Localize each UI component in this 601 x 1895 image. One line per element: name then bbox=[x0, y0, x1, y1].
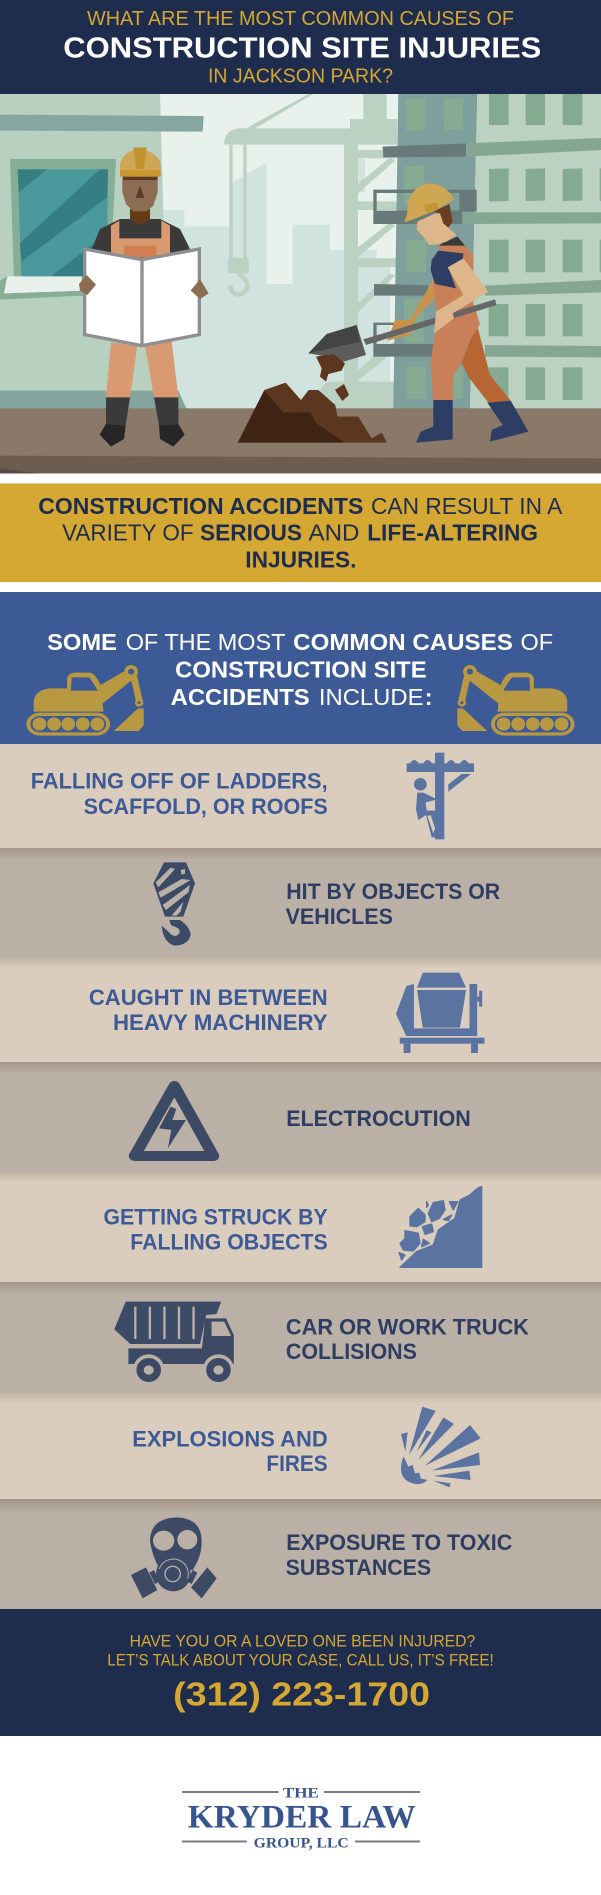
panel: blue section heading: CONSTRUCTION SITE bbox=[175, 657, 427, 683]
row: exposure to toxic substances bbox=[0, 1499, 601, 1609]
icon: crane hook bbox=[153, 862, 195, 946]
row: getting struck by falling objects bbox=[0, 1172, 601, 1282]
row text bbox=[286, 1314, 529, 1364]
row text bbox=[286, 1530, 512, 1580]
row text: SUBSTANCES bbox=[286, 1555, 431, 1580]
panel: gold intro statement: CAN RESULT IN A bbox=[371, 493, 563, 519]
call to action text: LET’S TALK ABOUT YOUR CASE, CALL US, IT’S FREE! bbox=[107, 1652, 494, 1670]
row text: CAUGHT IN BETWEEN bbox=[89, 985, 328, 1010]
row text: HEAVY MACHINERY bbox=[113, 1010, 328, 1035]
row text bbox=[132, 1427, 328, 1476]
row: hit by objects or vehicles bbox=[0, 848, 601, 958]
panel: blue section heading: SOME bbox=[47, 629, 117, 655]
phone number: (312) 223-1700 bbox=[173, 1676, 430, 1713]
panel: blue section heading: COMMON CAUSES bbox=[293, 629, 513, 655]
row text: EXPOSURE TO TOXIC bbox=[286, 1530, 512, 1555]
panel: blue section heading: ACCIDENTS bbox=[171, 684, 310, 710]
footer call to action bbox=[0, 1609, 601, 1736]
row text bbox=[31, 768, 328, 819]
row text bbox=[286, 879, 500, 929]
panel: blue section heading bbox=[0, 592, 601, 744]
icon: worker climbing utility pole bbox=[407, 753, 474, 839]
scaffold floors bbox=[373, 138, 601, 357]
row text: GETTING STRUCK BY bbox=[104, 1204, 328, 1229]
icon: gas mask bbox=[131, 1517, 217, 1598]
worker with shovel bbox=[308, 183, 528, 443]
central building bbox=[393, 94, 477, 409]
row: electrocution bbox=[0, 1062, 601, 1172]
row text: SCAFFOLD, OR ROOFS bbox=[84, 794, 328, 819]
dirt pile bbox=[238, 383, 387, 443]
panel: gold intro statement: CONSTRUCTION ACCIDENTS bbox=[38, 493, 363, 519]
row text: ELECTROCUTION bbox=[286, 1106, 471, 1131]
icon: high voltage warning triangle bbox=[135, 1086, 213, 1156]
header line: in Jackson Park: IN JACKSON PARK? bbox=[208, 66, 393, 88]
row text: CAR OR WORK TRUCK bbox=[286, 1314, 529, 1339]
logo: The Kryder Law Group, LLC bbox=[182, 1786, 420, 1851]
logo: The Kryder Law Group, LLC: KRYDER LAW bbox=[188, 1799, 416, 1835]
panel: blue section heading: OF THE MOST bbox=[126, 629, 286, 655]
header banner bbox=[0, 0, 601, 94]
panel: gold intro statement: VARIETY OF bbox=[62, 520, 194, 546]
icon: cement mixer bbox=[396, 973, 484, 1053]
row text: EXPLOSIONS AND bbox=[132, 1427, 328, 1452]
panel: gold intro statement bbox=[0, 484, 601, 582]
left building bbox=[0, 94, 204, 409]
panel: gold intro statement: SERIOUS bbox=[200, 520, 302, 546]
row: car or work truck collisions bbox=[0, 1282, 601, 1393]
title: CONSTRUCTION SITE INJURIES bbox=[63, 32, 541, 64]
row text bbox=[89, 985, 328, 1035]
call to action text: HAVE YOU OR A LOVED ONE BEEN INJURED? bbox=[130, 1633, 475, 1651]
icon: dump truck bbox=[114, 1302, 234, 1386]
ground bbox=[0, 408, 601, 473]
right building bbox=[470, 94, 601, 409]
icon: excavator left bbox=[28, 665, 144, 734]
logo: The Kryder Law Group, LLC: GROUP, LLC bbox=[254, 1835, 349, 1851]
icon: explosion burst bbox=[401, 1407, 481, 1487]
row text: FIRES bbox=[266, 1451, 328, 1476]
icon: excavator right bbox=[457, 665, 573, 734]
panel: blue section heading: : bbox=[425, 684, 433, 710]
city skyline bbox=[162, 159, 390, 409]
row text: COLLISIONS bbox=[286, 1339, 417, 1364]
row text: VEHICLES bbox=[286, 904, 393, 929]
call to action text bbox=[107, 1633, 494, 1670]
row: caught in between heavy machinery bbox=[0, 958, 601, 1062]
tower crane bbox=[224, 94, 397, 409]
panel: blue section heading: INCLUDE bbox=[319, 684, 424, 710]
panel: blue section heading: OF bbox=[520, 629, 553, 655]
icon: rockslide bbox=[399, 1187, 482, 1267]
row text bbox=[104, 1204, 328, 1254]
worker reading plans bbox=[79, 147, 209, 447]
logo: The Kryder Law Group, LLC: THE bbox=[283, 1786, 319, 1802]
illustration: construction site with two workers bbox=[0, 94, 601, 473]
header line: what are the most common causes of: WHAT ARE THE MOST COMMON CAUSES OF bbox=[87, 8, 514, 30]
panel: gold intro statement: LIFE-ALTERING bbox=[367, 520, 538, 546]
panel: gold intro statement: INJURIES. bbox=[245, 547, 356, 573]
row: falling off ladders bbox=[0, 744, 601, 848]
row text: FALLING OFF OF LADDERS, bbox=[31, 768, 328, 793]
row: explosions and fires bbox=[0, 1393, 601, 1499]
row text: HIT BY OBJECTS OR bbox=[286, 879, 500, 904]
panel: gold intro statement: AND bbox=[308, 520, 360, 546]
row text: FALLING OBJECTS bbox=[130, 1229, 328, 1254]
